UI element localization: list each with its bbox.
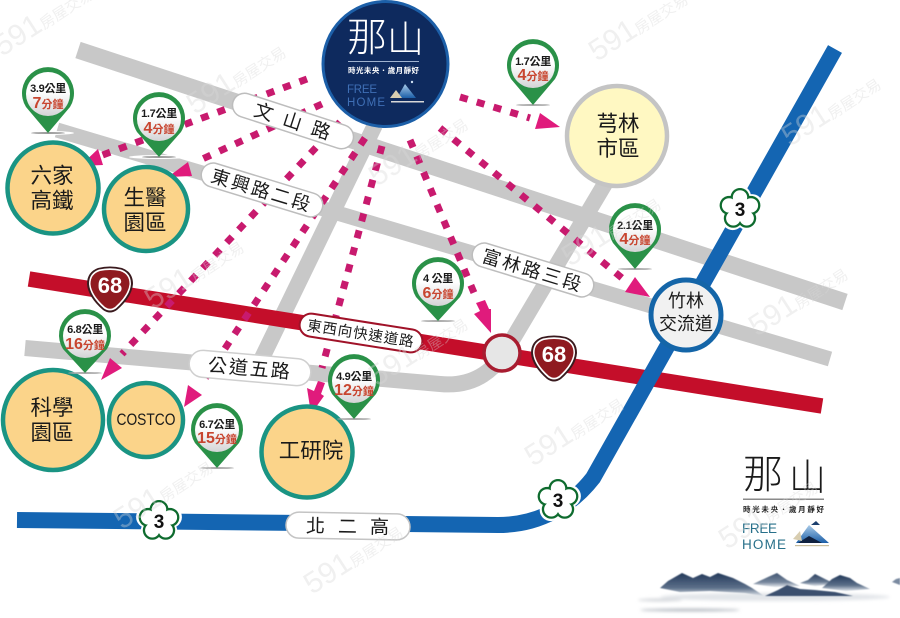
shield: highway 68 left [87,266,133,312]
circle: 竹林交流道: 竹林 [668,291,704,311]
shield: highway 68 right [531,336,577,382]
shield: freeway 3 left [136,498,182,542]
label: 富林路三段: 富林路三段 [480,245,586,296]
circle: 六家高鐵 [8,142,98,234]
circle: expressway interchange node [484,335,520,371]
circle: 科學園區 [3,370,103,470]
road: red expressway 68 [29,279,822,406]
icon: small mountain in badge [390,81,424,102]
shield: freeway 3 lower right: 3 [553,491,563,512]
decorative ink mountains [638,573,900,612]
pin: 6.8公里 16分鐘 [59,309,111,374]
circle: COSTCO [109,383,183,457]
label: 文山路 [229,90,357,152]
road: 東興路 / 富林路 gray road [57,130,830,359]
route arrow to central interchange [410,140,491,333]
pin: 6.7公里 15分鐘: 15分鐘 [197,430,237,447]
shield: highway 68 left: 68 [98,273,122,298]
road: blue freeway 3 [17,49,835,525]
pin: 1.7公里 4分鐘 生醫 [129,92,189,159]
watermarks: 591房屋交易 [139,228,249,316]
road: 公道五路 gray road curving to 芎林 [25,182,606,384]
route arrow to 竹林交流道 [440,128,650,297]
label: 東西向快速道路 [298,312,424,354]
route arrow to 六家高鐵 [80,79,307,166]
circle: 生醫園區 [104,167,188,251]
circle: 六家高鐵: 六家 [30,164,74,188]
logo badge: 那山 center: 山 [387,9,424,63]
route arrow to 生醫園區 [168,104,322,177]
pin: 3.9公里 7分鐘: 3.9公里 [30,81,66,95]
circle: 工研院: 工研院 [279,439,343,463]
watermarks: 591房屋交易 [363,105,473,193]
watermarks: 591房屋交易 [108,448,218,536]
road: diagonal gray road below logo [262,125,375,358]
circle: 竹林交流道: 交流道 [659,314,713,334]
pin: 2.1公里 4分鐘: 4分鐘 [620,231,650,248]
watermarks: 591房屋交易 [363,305,473,393]
watermarks: 591房屋交易 [519,385,629,473]
icon: small mountain in logo [793,521,829,546]
circle: 生醫園區: 生醫 [123,186,167,210]
label: 東西向快速道路: 東西向快速道路 [306,317,416,351]
pin: 6.8公里 16分鐘: 6.8公里 [67,322,103,336]
label: 公道五路 [188,349,312,387]
logo: 那山 bottom right [742,442,829,552]
road: 文山路 gray road [78,50,845,302]
pin: 6.7公里 15分鐘 [191,403,243,469]
shield: freeway 3 upper: 3 [735,200,745,221]
logo: 那山 bottom right: 山 [789,447,826,501]
logo badge: 那山 center: 那 [347,5,387,63]
pin: 2.1公里 4分鐘: 2.1公里 [617,218,653,232]
pin: 4公里 6分鐘: 4 公里 [423,271,453,285]
label: 文山路: 文山路 [251,99,344,148]
pin: 4公里 6分鐘 [412,257,464,322]
watermarks: 591房屋交易 [743,255,853,343]
circle: 工研院 [262,406,352,498]
label: 公道五路: 公道五路 [207,354,293,384]
pin: 6.8公里 16分鐘: 16分鐘 [65,336,105,353]
circle: 芎林市區: 芎林 [596,112,640,136]
circle: 芎林市區: 市區 [596,137,640,161]
pin: 1.7公里 4分鐘 芎林: 1.7公里 [515,54,551,68]
logo: 那山 bottom right: 時光未央．歲月靜好 [743,504,824,514]
pin: 4.9公里 12分鐘 [328,354,380,420]
route arrow to COSTCO [184,138,365,407]
logo: 那山 bottom right: 那 [743,442,783,500]
pin: 1.7公里 4分鐘 生醫: 4分鐘 [144,120,174,137]
pin: 6.7公里 15分鐘: 6.7公里 [199,417,235,431]
logo badge: 那山 center: 時光未央．歲月靜好 [348,65,420,75]
pin: 4.9公里 12分鐘: 4.9公里 [336,369,372,383]
pin: 3.9公里 7分鐘: 7分鐘 [33,95,63,112]
label: 北二高 [286,512,410,540]
shield: freeway 3 lower right [535,476,581,521]
pin: 1.7公里 4分鐘 生醫: 1.7公里 [141,106,177,120]
watermarks: 591房屋交易 [776,65,886,153]
logo: 那山 bottom right: HOME [742,537,786,552]
pin: 1.7公里 4分鐘 芎林 [507,39,559,106]
circle: COSTCO: COSTCO [116,410,176,429]
pin: 2.1公里 4分鐘 [609,203,661,270]
route arrow to 芎林市區 [460,97,560,129]
pin: 4公里 6分鐘: 6分鐘 [423,285,453,302]
circle: 科學園區: 科學 [30,396,74,420]
circle: 芎林市區 [567,86,667,186]
shield: freeway 3 left: 3 [154,512,164,533]
circle: 六家高鐵: 高鐵 [30,189,74,213]
watermarks: 591房屋交易 [298,513,408,601]
logo badge: 那山 center [323,2,448,126]
watermarks: 591房屋交易 [556,185,666,273]
circle: 生醫園區: 園區 [123,211,167,235]
pin: 4.9公里 12分鐘: 12分鐘 [334,382,374,399]
shield: freeway 3 upper [717,186,763,230]
watermarks: 591房屋交易 [713,468,823,556]
route arrow to 科學園區 [101,122,340,380]
circle: 竹林交流道 [651,280,721,350]
logo: 那山 bottom right: FREE [742,521,777,536]
label: 東興路二段: 東興路二段 [209,165,315,216]
logo badge: 那山 center: HOME [347,97,385,109]
pin: 3.9公里 7分鐘 [22,67,74,135]
logo badge: 那山 center: FREE [347,84,377,96]
pin: 1.7公里 4分鐘 芎林: 4分鐘 [518,67,548,84]
label: 北二高: 北二高 [306,515,402,539]
circle: 科學園區: 園區 [30,421,74,445]
shield: highway 68 right: 68 [542,342,566,367]
watermarks: 591房屋交易 [181,33,291,121]
route arrow to 工研院 [307,146,382,414]
